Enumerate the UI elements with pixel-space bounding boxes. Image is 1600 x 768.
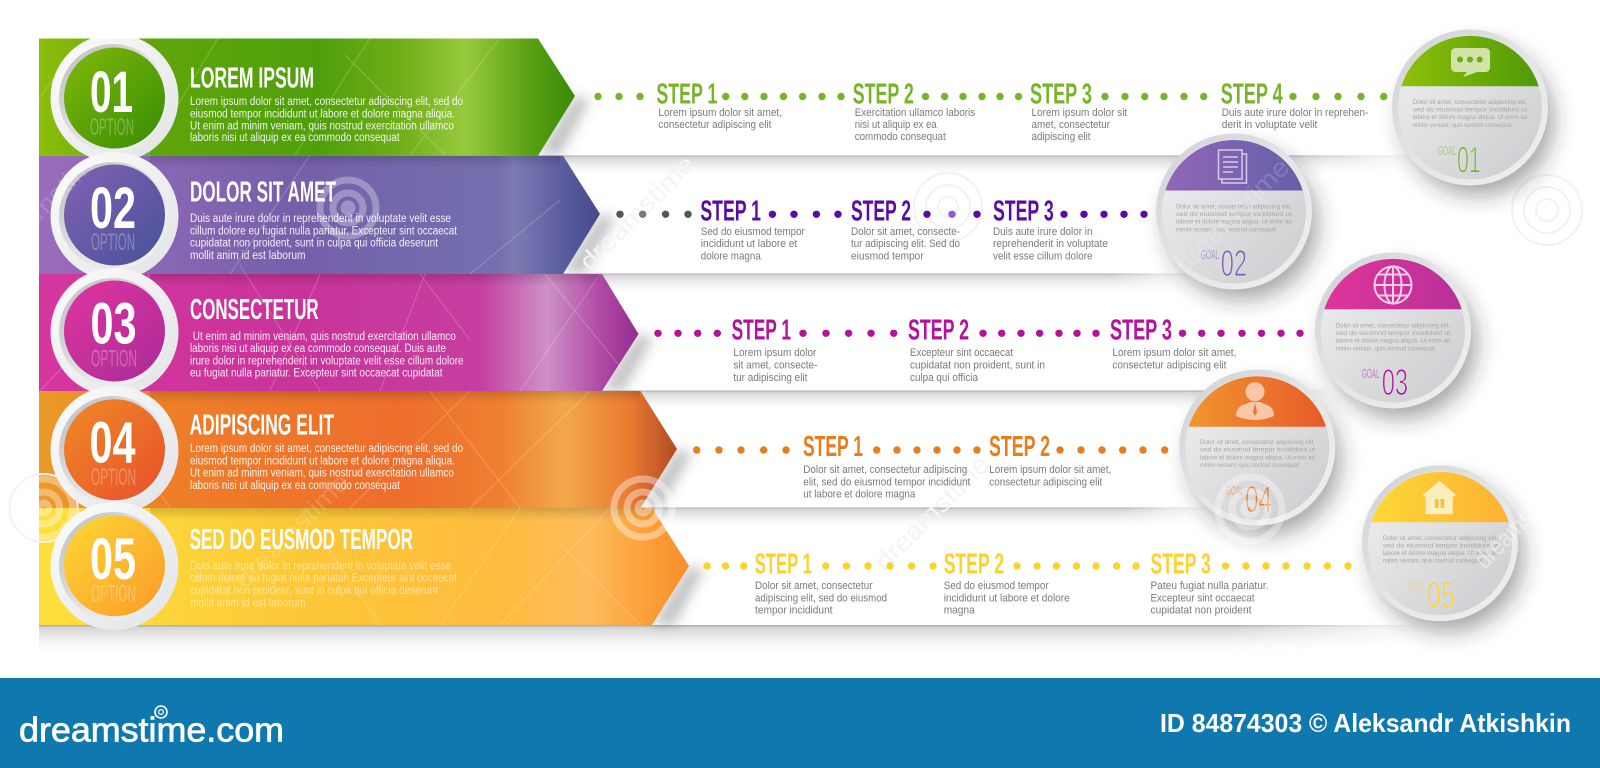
banner text: sed do eusmod tempor xyxy=(190,524,458,610)
icon: globe xyxy=(1374,266,1412,304)
banner text: dolor sit amet: cupidatat non proident, sunt in culpa qui officia deserunt xyxy=(190,238,439,250)
banner text: dolor sit amet: Duis aute irure dolor in reprehenderit in voluptate velit esse xyxy=(190,213,451,225)
goal circle 03: 03 xyxy=(1382,362,1408,403)
goal circle 01: sed do eiusmod tempor incididunt ut xyxy=(1413,107,1527,114)
row 2 steps: purple: Dolor sit amet, consecte- xyxy=(851,226,960,238)
row 3 steps: magenta: sit amet, consecte- xyxy=(733,360,818,372)
row 5 steps: yellow: STEP 3 xyxy=(1150,548,1211,580)
goal circle 03 xyxy=(1315,252,1477,419)
watermark text: dreamstime xyxy=(1168,152,1295,279)
banner text: sed do eusmod tempor: cillum dolore eu fugiat nulla pariatur. Excepteur sint occaecat xyxy=(190,572,458,584)
row 3 steps: magenta: Lorem ipsum dolor sit amet, xyxy=(1112,347,1236,359)
banner text: consectetur: Ut enim ad minim veniam, quis nostrud exercitation ullamco xyxy=(193,331,456,343)
row 4 steps: orange: Lorem ipsum dolor sit amet, xyxy=(989,464,1111,476)
goal circle 02: labore et dolore magna aliqua. Ut enim ad xyxy=(1176,219,1292,226)
goal circle 05: labore et dolore magna aliqua. Ut enim ad xyxy=(1383,550,1498,557)
row 3 steps: magenta: Lorem ipsum dolor xyxy=(733,347,817,359)
panel: magenta arrow banner xyxy=(39,274,638,391)
banner top shading xyxy=(150,156,650,520)
row 5 steps: yellow xyxy=(703,548,1352,616)
banner text: adipiscing elit: Lorem ipsum dolor sit amet, consectetur adipiscing elit, sed do xyxy=(190,443,463,455)
banner text: consectetur: CONSECTETUR xyxy=(190,294,319,326)
watermark text on white xyxy=(573,149,995,576)
banner text: consectetur: eu fugiat nulla pariatur. Excepteur sint occaecat cupidatat xyxy=(190,368,443,380)
row 5 steps: yellow: Excepteur sint occaecat xyxy=(1150,592,1254,604)
row 2 steps: purple: STEP 1 xyxy=(700,196,761,228)
goal circle 05: GOAL xyxy=(1408,580,1426,594)
row 5 steps: yellow: Pateu fugiat nulla pariatur. xyxy=(1150,580,1268,592)
badge 05: OPTION xyxy=(91,581,136,608)
row 5 steps: yellow: incididunt ut labore et dolore xyxy=(944,592,1070,604)
banner text: lorem ipsum: Lorem ipsum dolor sit amet, consectetur adipiscing elit, sed do xyxy=(190,96,463,108)
row 3 steps: magenta: tur adipiscing elit xyxy=(733,372,807,384)
goal circle 03: Dolor sit amet, consectetur adipiscing elit, xyxy=(1336,322,1450,329)
row 4 steps: orange: STEP 2 xyxy=(989,431,1050,463)
row 5 steps: yellow: adipiscing elit, sed do eiusmod xyxy=(755,592,887,604)
footer credit: ID 84874303 © Aleksandr Atkishkin xyxy=(1160,708,1571,738)
goal circle 02: sed do eiusmod tempor incididunt ut xyxy=(1176,211,1292,218)
row 5 steps: yellow: tempor incididunt xyxy=(755,604,833,616)
row 5 steps: yellow: STEP 1 xyxy=(755,548,812,580)
badge 04 xyxy=(50,386,178,514)
banner text: consectetur: laboris nisi ut aliquip ex ea commodo consequat. Duis aute xyxy=(190,343,446,355)
goal circle 01: GOAL xyxy=(1438,144,1456,158)
badge 05: 05 xyxy=(90,527,136,592)
row 1 steps: green: consectetur adipiscing elit xyxy=(658,119,771,131)
row 2 steps: purple: tur adipiscing elit. Sed do xyxy=(851,238,960,250)
watermark text: dreamstime xyxy=(1468,475,1567,574)
goal circle 01: 01 xyxy=(1457,140,1481,181)
goal circle 02: 02 xyxy=(1221,243,1247,284)
row 5 steps: yellow: magna xyxy=(944,604,976,616)
row 3 steps: magenta xyxy=(654,314,1304,384)
row 2 steps: purple: Duis aute irure dolor in xyxy=(993,226,1092,238)
banner text: dolor sit amet: cillum dolore eu fugiat nulla pariatur. Excepteur sint occaecat xyxy=(190,226,458,238)
watermark spirals xyxy=(15,180,1282,541)
row 1 steps: green: Lorem ipsum dolor sit amet, xyxy=(658,107,782,119)
goal circle 01: Dolor sit amet, consectetur adipiscing elit, xyxy=(1413,99,1527,106)
row 1 steps: green: STEP 3 xyxy=(1030,78,1092,110)
row 1 steps: green: Lorem ipsum dolor sit xyxy=(1032,107,1127,119)
row 3 steps: magenta: STEP 3 xyxy=(1110,314,1172,346)
badge 05 xyxy=(50,502,178,630)
goal circle 05: Dolor sit amet, consectetur adipiscing elit, xyxy=(1383,535,1498,542)
row 1 steps: green: STEP 2 xyxy=(853,78,914,110)
row 1 steps: green xyxy=(594,78,1387,143)
row 3 steps: magenta: STEP 1 xyxy=(732,314,791,346)
banner text: sed do eusmod tempor: cupidatat non proident, sunt in culpa qui officia deserunt xyxy=(190,585,439,597)
goal circle 05: 05 xyxy=(1427,575,1455,616)
goal circle 02: minim veniam, quis nostrud consequat xyxy=(1176,226,1276,233)
row 1 steps: green: adipiscing elit xyxy=(1032,131,1090,143)
row 1 steps: green: Exercitation ullamco laboris xyxy=(855,107,976,119)
footer logo: dreamstime.com xyxy=(19,712,284,750)
badge 01: 01 xyxy=(90,60,133,125)
panel: yellow arrow banner xyxy=(39,508,689,625)
goal circle 02: Dolor sit amet, consectetur adipiscing elit, xyxy=(1176,203,1292,210)
row shadow lines xyxy=(39,156,1439,653)
badge 03 xyxy=(50,268,178,396)
banner text: dolor sit amet: mollit anim id est laborum xyxy=(190,250,306,262)
icon: document xyxy=(1218,150,1246,183)
goal circle 04: 04 xyxy=(1245,479,1272,520)
row 1 steps: green: commodo consequat xyxy=(855,131,946,143)
row 2 steps: purple: STEP 3 xyxy=(993,196,1054,228)
badge 02: 02 xyxy=(90,176,136,241)
goal circle 03: labore et dolore magna aliqua. Ut enim ad xyxy=(1336,338,1451,345)
footer bar xyxy=(0,678,1600,768)
goal circle 04: sed do eiusmod tempor incididunt ut xyxy=(1200,447,1315,454)
banner text: adipiscing elit: laboris nisi ut aliquip ex ea commodo consequat xyxy=(190,480,401,492)
row 4 steps: orange: Dolor sit amet, consectetur adipiscing xyxy=(803,464,967,476)
banner text: adipiscing elit: ADIPISCING ELIT xyxy=(190,409,334,441)
goal circle 05: sed do eiusmod tempor incididunt ut xyxy=(1383,543,1498,550)
row 3 steps: magenta: cupidatat non proident, sunt in xyxy=(910,360,1045,372)
watermark text on white: dreamstime xyxy=(868,449,995,576)
goal circle 04: minim veniam, quis nostrud consequat xyxy=(1200,462,1299,469)
row 5 steps: yellow: cupidatat non proident xyxy=(1150,604,1252,616)
banner text: adipiscing elit xyxy=(190,409,463,492)
goal circle 04: Dolor sit amet, consectetur adipiscing elit, xyxy=(1200,439,1315,446)
row 1 steps: green: Duis aute irure dolor in reprehen- xyxy=(1222,107,1369,119)
goal circle 03: sed do eiusmod tempor incididunt ut xyxy=(1336,330,1450,337)
badge 01 xyxy=(50,34,178,162)
goal circle 01: labore et dolore magna aliqua. Ut enim ad xyxy=(1413,114,1528,121)
banner text: dolor sit amet xyxy=(190,177,458,262)
panel: orange arrow banner xyxy=(39,391,677,508)
banner text: consectetur: irure dolor in reprehenderit in voluptate velit esse cillum dolore xyxy=(190,356,464,368)
banner text: lorem ipsum xyxy=(190,62,463,144)
watermark text xyxy=(0,139,1567,594)
row 2 steps: purple: STEP 2 xyxy=(851,196,911,228)
banner text: sed do eusmod tempor: Duis aute irure dolor in reprehenderit in voluptate velit esse xyxy=(190,560,451,572)
faint watermark spirals on white xyxy=(10,173,1582,542)
panel: green arrow banner xyxy=(39,38,575,156)
goal circle 04: GOAL xyxy=(1226,484,1244,498)
banner text: adipiscing elit: eiusmod tempor incididunt ut labore et dolore magna aliqua. xyxy=(190,456,455,468)
goal circle 05 xyxy=(1362,465,1524,632)
goal circle 03: minim veniam, quis nostrud consequat xyxy=(1336,345,1435,352)
goal circle 02: GOAL xyxy=(1201,248,1219,262)
row 5 steps: yellow: Sed do eiusmod tempor xyxy=(944,580,1049,592)
goal circle 01 xyxy=(1392,30,1554,196)
panel: purple arrow banner xyxy=(39,156,600,274)
row 1 steps: green: nisi ut aliquip ex ea xyxy=(855,119,937,131)
row 2 steps: purple: velit esse cillum dolore xyxy=(993,250,1092,262)
banner text: lorem ipsum: eiusmod tempor incididunt ut labore et dolore magna aliqua. xyxy=(190,108,455,120)
row 2 steps: purple: dolore magna xyxy=(701,250,762,262)
icon: house xyxy=(1423,481,1456,514)
banner text: lorem ipsum: laboris nisi ut aliquip ex ea commodo consequat xyxy=(190,132,400,144)
badge 02 xyxy=(50,152,178,280)
row 1 steps: green: derit in voluptate velit xyxy=(1222,119,1317,131)
badge 02: OPTION xyxy=(91,229,135,256)
icon: speech bubble xyxy=(1451,48,1490,77)
row 2 steps: purple: reprehenderit in voluptate xyxy=(993,238,1108,250)
row 2 steps: purple: eiusmod tempor xyxy=(851,250,924,262)
goal circle 04: labore et dolore magna aliqua. Ut enim ad xyxy=(1200,454,1315,461)
banner text: sed do eusmod tempor: SED DO EUSMOD TEMPOR xyxy=(190,524,413,556)
row 2 steps: purple xyxy=(616,196,1148,262)
banner text: consectetur xyxy=(190,294,464,380)
watermark lines xyxy=(39,38,640,625)
row 3 steps: magenta: STEP 2 xyxy=(908,314,969,346)
row 2 steps: purple: Sed do eiusmod tempor xyxy=(701,226,805,238)
badge 04: 04 xyxy=(90,411,136,476)
row 4 steps: orange: ut labore et dolore magna xyxy=(803,488,916,500)
badge 01: OPTION xyxy=(90,114,134,141)
row 2 steps: purple: incididunt ut labore et xyxy=(701,238,797,250)
row 4 steps: orange: consectetur adipiscing elit xyxy=(989,476,1102,488)
row 5 steps: yellow: STEP 2 xyxy=(944,548,1004,580)
watermark text: dreamstime xyxy=(228,467,355,594)
row 4 steps: orange: elit, sed do eiusmod tempor incididunt xyxy=(803,476,970,488)
watermark text on white: dreamstime xyxy=(573,149,700,276)
banner text: dolor sit amet: DOLOR SIT AMET xyxy=(190,177,336,209)
arrow diagonal shadows xyxy=(538,96,704,625)
goal circle 05: minim veniam, quis nostrud consequat xyxy=(1383,558,1483,565)
banner text: lorem ipsum: LOREM IPSUM xyxy=(190,62,314,94)
row 1 steps: green: STEP 1 xyxy=(656,78,717,110)
banner text: lorem ipsum: Ut enim ad minim veniam, quis nostrud exercitation ullamco xyxy=(190,120,454,132)
badge 04: OPTION xyxy=(91,464,136,491)
row 5 steps: yellow: Dolor sit amet, consectetur xyxy=(755,580,873,592)
goal circle 03: GOAL xyxy=(1362,367,1380,381)
badge 03: 03 xyxy=(90,291,136,356)
badge 03: OPTION xyxy=(91,346,137,373)
goal circle 04 xyxy=(1179,370,1341,536)
row 1 steps: green: amet, consectetur xyxy=(1032,119,1110,131)
row 3 steps: magenta: Excepteur sint occaecat xyxy=(910,347,1013,359)
row 4 steps: orange xyxy=(693,431,1168,500)
row 1 steps: green: STEP 4 xyxy=(1221,78,1283,110)
row 4 steps: orange: STEP 1 xyxy=(803,431,863,463)
row 3 steps: magenta: culpa qui officia xyxy=(910,372,979,384)
goal circle 02 xyxy=(1156,134,1318,300)
banner text: adipiscing elit: Ut enim ad minim veniam, quis nostrud exercitation ullamco xyxy=(190,468,454,480)
row 3 steps: magenta: consectetur adipiscing elit xyxy=(1112,360,1226,372)
banner text: sed do eusmod tempor: mollit anim id est laborum xyxy=(190,598,306,610)
icon: person xyxy=(1236,382,1274,420)
goal circle 01: minim veniam, quis nostrud consequat xyxy=(1413,122,1512,129)
